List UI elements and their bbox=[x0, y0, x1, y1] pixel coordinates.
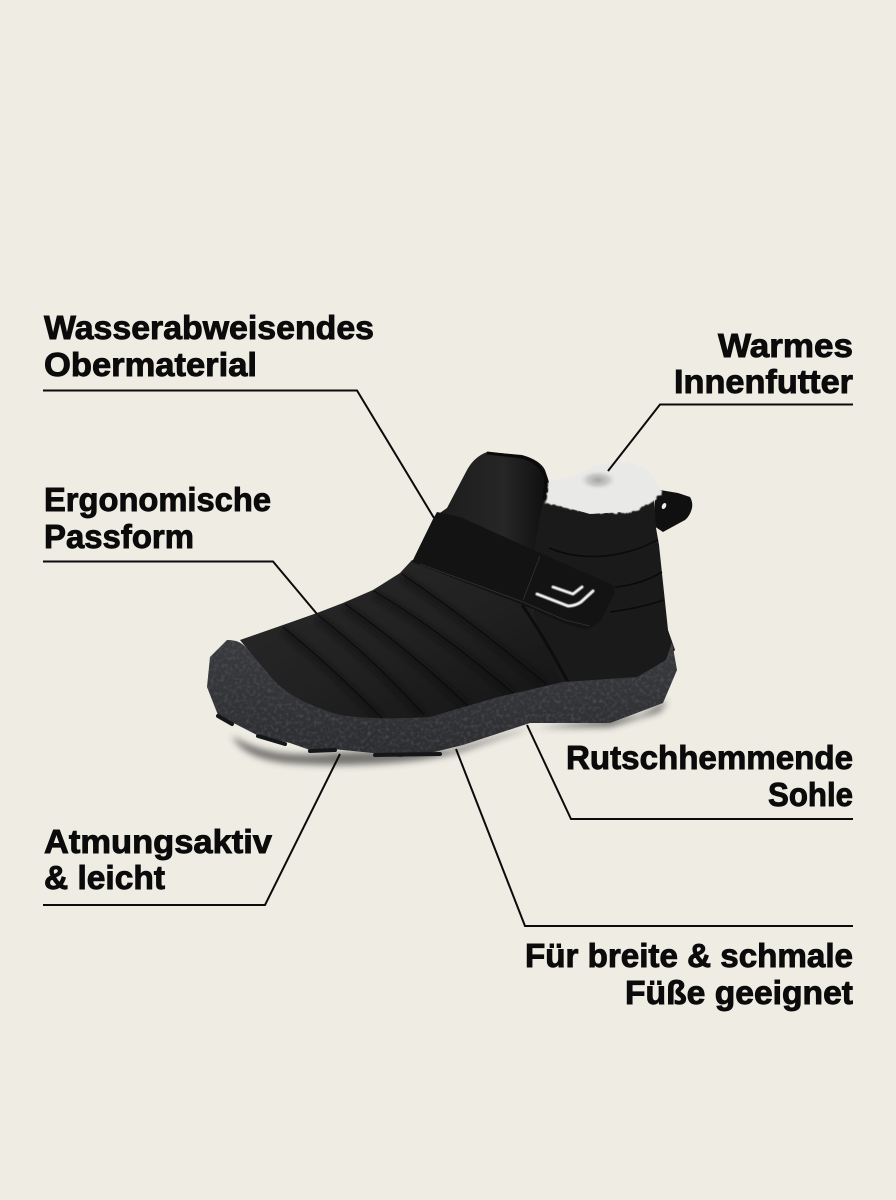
callout: Für breite & schmale Füße geeignet: Füße geeignet bbox=[625, 974, 853, 1011]
callout: Warmes Innenfutter: Warmes bbox=[718, 327, 853, 364]
callout: Wasserabweisendes Obermaterial: Wasserabweisendes bbox=[44, 309, 374, 346]
callout: Wasserabweisendes Obermaterial: Obermaterial bbox=[44, 346, 257, 383]
quilting seams bbox=[283, 574, 568, 718]
callout: Für breite & schmale Füße geeignet: Für breite & schmale bbox=[525, 937, 853, 974]
callout: Rutschhemmende Sohle bbox=[527, 725, 853, 819]
collar and heel upper bbox=[530, 500, 675, 700]
callout: Rutschhemmende Sohle: Rutschhemmende bbox=[566, 739, 853, 776]
tongue bbox=[437, 452, 549, 565]
rubber sole bbox=[207, 640, 677, 757]
callout: Ergonomische Passform: Ergonomische bbox=[44, 481, 271, 518]
callout: Warmes Innenfutter: Innenfutter bbox=[674, 363, 853, 400]
ground shadow bbox=[232, 700, 668, 765]
callout: Atmungsaktiv & leicht bbox=[43, 754, 340, 905]
strap logo bbox=[537, 587, 593, 606]
callout: Für breite & schmale Füße geeignet bbox=[456, 749, 853, 1011]
callout: Atmungsaktiv & leicht: & leicht bbox=[44, 859, 165, 896]
callout: Warmes Innenfutter bbox=[608, 327, 853, 471]
callout: Wasserabweisendes Obermaterial bbox=[43, 309, 434, 518]
callout: Ergonomische Passform: Passform bbox=[44, 518, 194, 555]
sole pebble texture bbox=[207, 640, 677, 757]
heel pull tab bbox=[654, 490, 692, 532]
quilted toe upper bbox=[240, 560, 565, 725]
callout: Rutschhemmende Sohle: Sohle bbox=[768, 776, 853, 813]
tread lugs bbox=[218, 716, 440, 755]
fleece lining bbox=[545, 462, 662, 513]
callout: Atmungsaktiv & leicht: Atmungsaktiv bbox=[44, 823, 273, 860]
shoe photo bbox=[207, 452, 692, 765]
quilted panel shading bbox=[283, 577, 544, 718]
velcro strap bbox=[412, 512, 615, 630]
callout: Ergonomische Passform bbox=[43, 481, 317, 614]
fleece inner hollow bbox=[579, 470, 617, 490]
